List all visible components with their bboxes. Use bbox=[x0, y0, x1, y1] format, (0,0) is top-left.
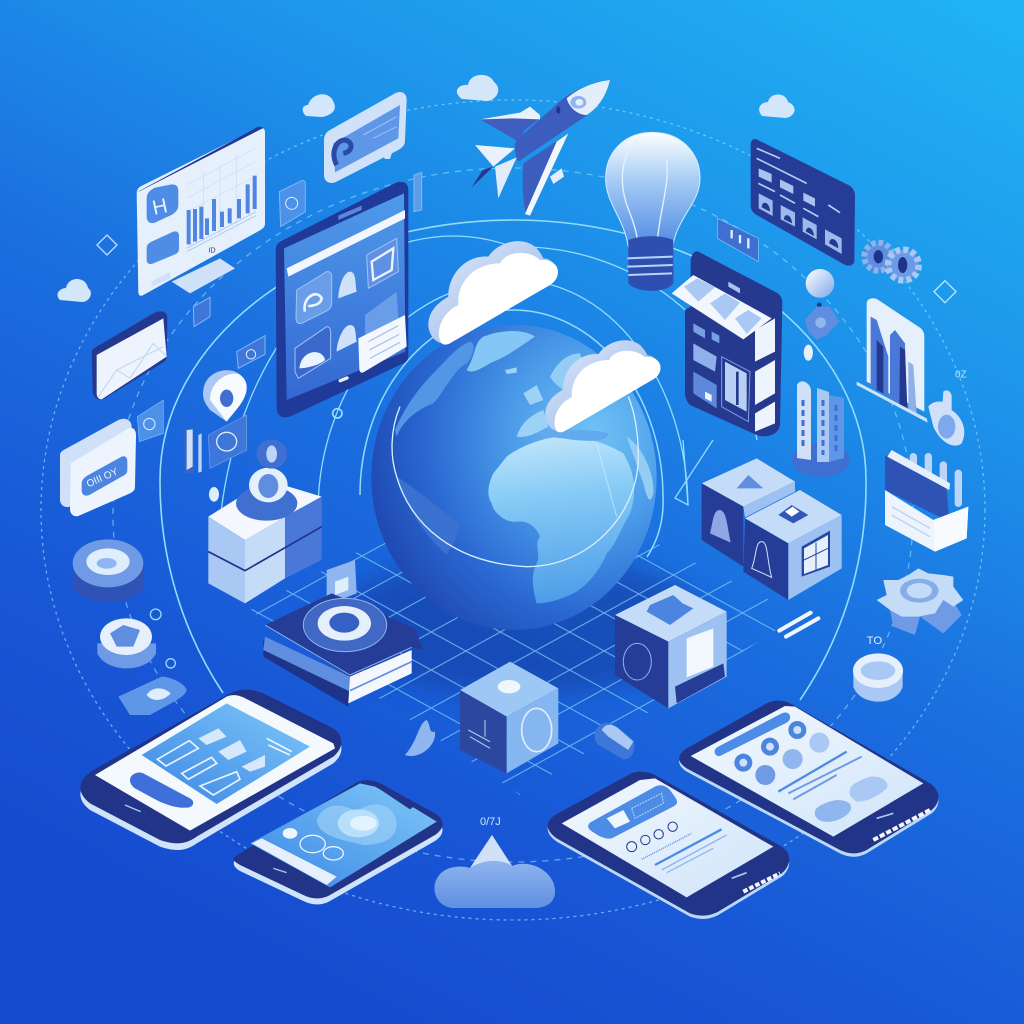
cloud at the bottom: 0/7J bbox=[480, 816, 501, 828]
continent: Greenland bbox=[467, 331, 535, 372]
icon: cog right: TO bbox=[867, 635, 882, 647]
small app tiles upper left bbox=[193, 172, 422, 418]
icon: id card bbox=[60, 419, 136, 516]
bars bbox=[189, 176, 255, 244]
panel: top card bbox=[324, 92, 407, 183]
logo tile bbox=[147, 184, 178, 223]
small floating clouds bbox=[58, 75, 795, 302]
icon: ball and gear pin bbox=[804, 269, 839, 361]
panel: shop phone bbox=[672, 251, 782, 436]
icon: cylinder button bbox=[853, 653, 903, 702]
icon: light bulb bbox=[606, 132, 700, 291]
monitor stand bbox=[172, 258, 235, 293]
continent: Asia bbox=[550, 353, 653, 500]
continent: North America bbox=[395, 342, 474, 437]
floor grid bbox=[251, 542, 776, 795]
tablet address bar bbox=[287, 210, 405, 277]
icon: book bbox=[263, 560, 423, 707]
phone 3 rim bbox=[548, 775, 789, 919]
icon: centre cube bbox=[460, 662, 558, 773]
phone 2 notch bbox=[375, 784, 417, 809]
icon: cog right bbox=[867, 568, 963, 647]
icon: small capsule bbox=[595, 723, 635, 759]
small pill bbox=[147, 231, 179, 264]
phone 4 bbox=[679, 701, 938, 857]
box back bbox=[702, 458, 795, 507]
phone 4 rim bbox=[679, 704, 938, 857]
icon: gears bbox=[864, 243, 919, 280]
phone 2 rim bbox=[234, 786, 442, 904]
icon: stacked blocks with ornament bbox=[208, 439, 322, 603]
monitor screen bbox=[137, 127, 265, 296]
panel: monitor with bar chart bbox=[137, 127, 265, 296]
tablet note bbox=[358, 315, 407, 373]
tablet app tiles bbox=[296, 272, 332, 324]
panel: dark app panel bbox=[751, 139, 855, 266]
shop awning bbox=[672, 275, 772, 339]
panel: monitor with bar chart: H bbox=[150, 194, 170, 220]
panel: chart card: 0Z bbox=[955, 369, 967, 380]
panel: large tablet bbox=[276, 182, 408, 417]
globe equator ring bbox=[392, 397, 638, 567]
continent: South America bbox=[397, 477, 460, 555]
icon: rocket plane bbox=[472, 80, 610, 216]
icon: leaf bbox=[405, 720, 435, 756]
globe bbox=[371, 325, 657, 630]
panel: chart card bbox=[857, 298, 967, 423]
panel: monitor with bar chart: ID bbox=[208, 245, 216, 254]
icon: ball bbox=[97, 609, 175, 668]
orbit rings bbox=[41, 100, 985, 920]
phone 3 blue card bbox=[588, 785, 677, 839]
continent: Africa bbox=[488, 437, 634, 603]
box front bbox=[745, 490, 842, 543]
icon: tower bars bbox=[792, 381, 850, 477]
icon: envelope bbox=[92, 311, 167, 400]
small tile near bulb bbox=[717, 218, 758, 262]
icon: ring bbox=[73, 539, 143, 602]
panel: folder with cards bbox=[885, 450, 968, 552]
cloud at the bottom bbox=[434, 816, 555, 908]
icon: location pin bbox=[137, 370, 247, 474]
phone 1 rim bbox=[80, 696, 341, 850]
icon: media cube bbox=[615, 585, 727, 708]
sparkle diamond bbox=[934, 281, 956, 303]
phone 4 header bar bbox=[715, 713, 790, 756]
phone 3 bbox=[548, 772, 789, 919]
icon: id card: OIII OY bbox=[85, 466, 120, 490]
phone 1 screen bbox=[95, 695, 335, 831]
shop window panels bbox=[755, 318, 775, 432]
icon: boxes pair bbox=[702, 458, 842, 600]
sparkle diamond left bbox=[97, 235, 117, 255]
phone 2 white strip bbox=[252, 838, 337, 885]
icon: pebble bbox=[118, 677, 187, 715]
continent: Europe bbox=[505, 367, 548, 437]
phone 2 bbox=[234, 780, 442, 904]
phone 2 heart bbox=[317, 804, 397, 845]
decorative white dashes bbox=[779, 613, 818, 637]
phone 1 bbox=[80, 690, 341, 850]
cloud beside globe bbox=[545, 340, 661, 432]
icon: ring knob bbox=[928, 390, 964, 446]
cloud on top of globe bbox=[428, 241, 558, 345]
